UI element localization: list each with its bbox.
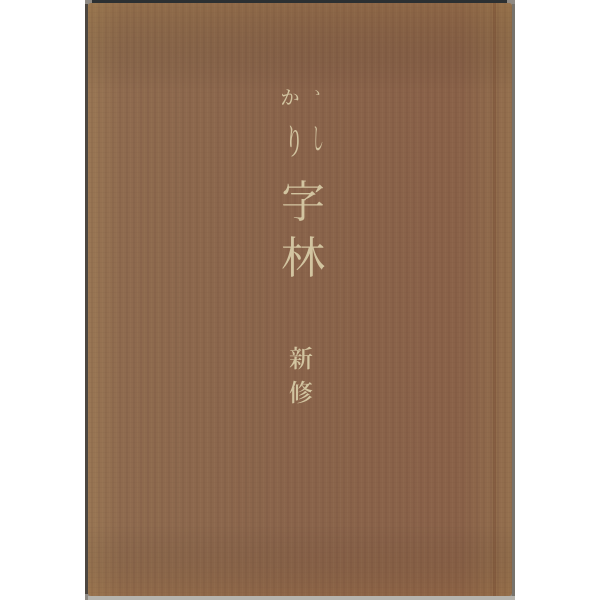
- spine groove: [493, 3, 496, 596]
- subtitle: 新修: 修: [289, 380, 313, 407]
- title: かな字林: 字: [281, 178, 325, 227]
- subtitle: 新修: 新: [289, 346, 313, 373]
- title: かな字林: し: [312, 123, 324, 156]
- title: かな字林: 林: [281, 234, 325, 283]
- title: かな字林: り: [285, 123, 303, 161]
- subtitle: 新修: [289, 346, 313, 407]
- title: かな字林: [280, 85, 325, 283]
- title: かな字林: か: [280, 88, 300, 109]
- book cover: [85, 0, 515, 600]
- title: かな字林: ゝ: [310, 85, 324, 100]
